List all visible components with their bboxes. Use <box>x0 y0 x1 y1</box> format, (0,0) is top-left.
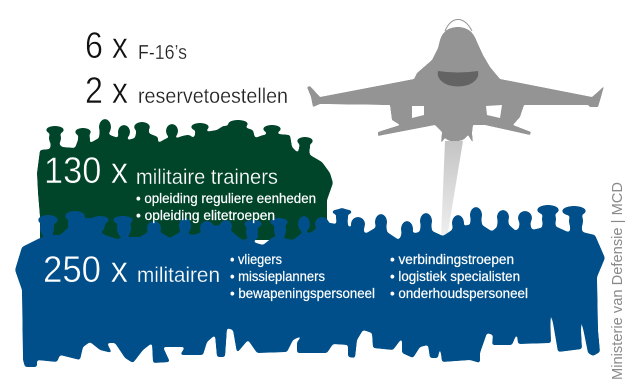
list: personnel right column <box>390 252 528 301</box>
heading: 2 x reservetoestellen: 2 x <box>85 70 128 111</box>
text: 130 x militaire trainers <box>44 150 278 191</box>
list: personnel left column: • missieplanners <box>230 269 325 284</box>
text: 130 x militaire trainers: militaire trainers <box>136 166 278 189</box>
text: 250 x militairen: 250 x <box>43 249 128 290</box>
list: personnel left column <box>230 252 375 301</box>
heading: 6 x F-16's: F-16’s <box>138 42 187 64</box>
silhouette: blue personnel group <box>15 205 605 367</box>
list: personnel right column: • logistiek specialisten <box>390 269 520 284</box>
text: 250 x militairen <box>43 249 220 290</box>
icon: F-16 jet <box>307 20 604 143</box>
silhouette: green trainers group <box>37 119 333 240</box>
text: 130 x militaire trainers: 130 x <box>44 150 128 191</box>
heading: 2 x reservetoestellen: reservetoestellen <box>138 85 288 108</box>
list: personnel right column: • onderhoudspersoneel <box>390 286 528 301</box>
credit: Ministerie van Defensie | MCD <box>609 182 626 380</box>
list: personnel right column: • verbindingstroepen <box>390 252 514 267</box>
heading: 2 x reservetoestellen <box>85 70 288 111</box>
exhaust trail <box>441 141 463 238</box>
list: personnel left column: • vliegers <box>230 252 282 267</box>
text: 250 x militairen: militairen <box>137 264 220 287</box>
list: trainer training types <box>136 191 316 223</box>
list: personnel left column: • bewapeningspersoneel <box>230 286 375 301</box>
list: trainer training types: • opleiding elitetroepen <box>136 208 275 223</box>
list: trainer training types: • opleiding reguliere eenheden <box>136 191 316 206</box>
heading: 6 x F-16's: 6 x <box>85 25 128 66</box>
heading: 6 x F-16's <box>85 25 187 66</box>
